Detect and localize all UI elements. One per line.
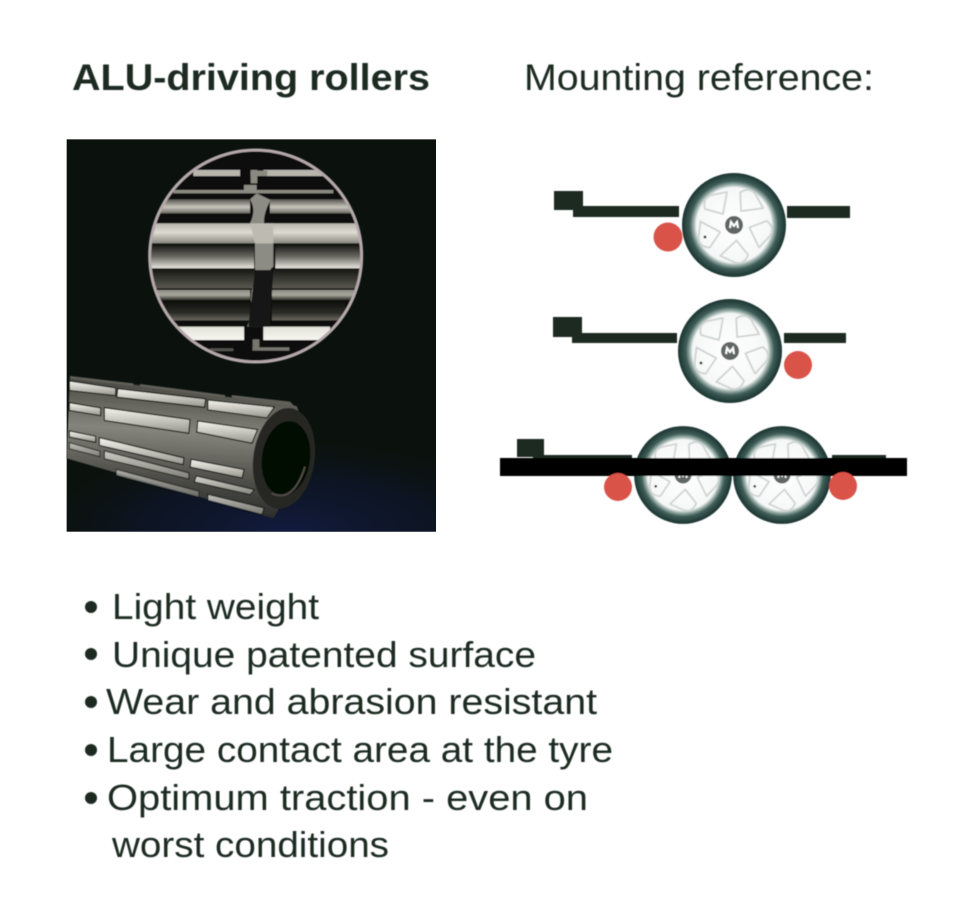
heading: Mounting reference: Mounting reference: bbox=[524, 57, 874, 98]
bullet 5 bbox=[85, 777, 588, 865]
bullet 5: worst conditions bbox=[111, 824, 389, 865]
photo panel: roller detail and roller tube bbox=[67, 139, 436, 532]
wheel bbox=[682, 173, 786, 277]
roller position: red dot bbox=[654, 222, 682, 252]
magnified roller surface bbox=[147, 149, 370, 363]
bullet 4: Large contact area at the tyre bbox=[107, 729, 613, 770]
rear chassis bar bbox=[832, 455, 886, 461]
bullet 2: Unique patented surface bbox=[112, 634, 536, 675]
rear roller: red dot bbox=[829, 472, 857, 500]
chassis bar and hitch bbox=[553, 317, 677, 343]
bullet 1: Light weight bbox=[112, 586, 319, 627]
front wheel bbox=[634, 426, 732, 524]
mounting diagram: wheel with roller in front bbox=[554, 173, 850, 277]
rear chassis bar bbox=[787, 206, 850, 218]
roller tube bbox=[67, 376, 321, 518]
mounting diagram: tandem axle with two rollers bbox=[500, 426, 907, 524]
front roller: red dot bbox=[604, 473, 632, 501]
chassis bar and hitch bbox=[517, 439, 632, 462]
roller position: red dot bbox=[784, 351, 812, 379]
rear wheel bbox=[733, 426, 831, 524]
bullet 3: Wear and abrasion resistant bbox=[106, 681, 597, 722]
chassis bar and hitch bbox=[554, 191, 679, 217]
rear chassis bar bbox=[784, 333, 846, 343]
title: ALU-driving rollers: ALU-driving rollers bbox=[72, 57, 430, 98]
mounting diagram: wheel with roller behind bbox=[553, 299, 846, 403]
bullet list of features bbox=[85, 586, 613, 865]
black bar across wheels bbox=[500, 458, 907, 476]
bullet 5: Optimum traction - even on bbox=[107, 777, 588, 818]
wheel bbox=[678, 299, 782, 403]
